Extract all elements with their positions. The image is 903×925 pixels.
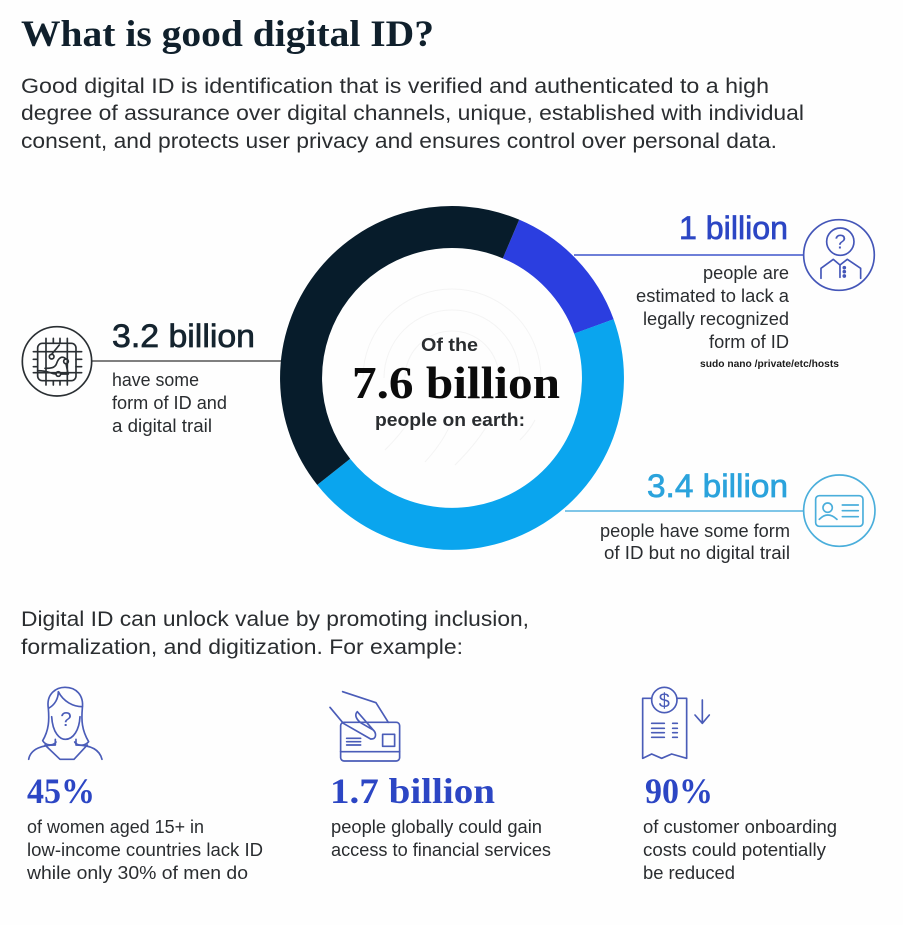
segment: 3.4 billion xyxy=(334,326,603,529)
icon: hand holding card xyxy=(330,692,400,761)
stat: 90%: of customer onboarding xyxy=(643,817,837,837)
stat: 90%: 90% xyxy=(645,771,713,811)
callout: 3.4 billion: people have some form xyxy=(600,521,790,541)
intro text block: consent, and protects user privacy and ensures control over personal data. xyxy=(21,129,777,153)
callout: 1 billion: 1 billion xyxy=(679,210,788,246)
icon: person with question mark: ? xyxy=(835,231,846,254)
callout: 3.2 billion: a digital trail xyxy=(112,416,212,436)
connector line: 3.4 billion xyxy=(565,510,803,512)
stat: 45% of women: 45% xyxy=(27,771,95,811)
intro text block: Good digital ID is identification that is verified and authenticated to a high xyxy=(21,74,769,98)
section intro text xyxy=(21,607,529,659)
donut chart: 7.6 billion people xyxy=(301,227,603,529)
callout: 1 billion: people are xyxy=(703,263,789,283)
overlay note: sudo nano /private/etc/hosts xyxy=(700,358,839,370)
callout: 3.2 billion xyxy=(22,318,281,436)
stat: 1.7 billion: people globally could gain xyxy=(331,817,542,837)
stat: 45% of women: of women aged 15+ in xyxy=(27,817,204,837)
title: What is good digital ID? xyxy=(21,14,434,55)
icon: woman with question mark: ? xyxy=(60,708,72,731)
callout: 3.2 billion: 3.2 billion xyxy=(112,318,255,354)
icon: circuit chip xyxy=(22,327,92,396)
icon: woman with question mark xyxy=(29,687,102,759)
stat: 1.7 billion: 1.7 billion xyxy=(330,771,495,811)
stat: 90%: be reduced xyxy=(643,863,735,883)
section intro text: Digital ID can unlock value by promoting inclusion, xyxy=(21,607,529,631)
icon: person with question mark xyxy=(804,220,874,290)
stat: 45% of women: low-income countries lack ID xyxy=(27,840,263,860)
section intro text: formalization, and digitization. For example: xyxy=(21,635,463,659)
donut centre label xyxy=(352,335,560,430)
stat: 45% of women: while only 30% of men do xyxy=(26,863,248,883)
stat: 90%: costs could potentially xyxy=(643,840,826,860)
callout: 3.4 billion: of ID but no digital trail xyxy=(604,543,790,563)
segment: 3.2 billion xyxy=(301,227,511,472)
callout: 3.2 billion: form of ID and xyxy=(112,393,227,413)
callout: 3.2 billion: have some xyxy=(112,370,199,390)
callout: 1 billion: estimated to lack a xyxy=(636,286,790,306)
stat: 1.7 billion: access to financial services xyxy=(331,840,551,860)
callout: 3.4 billion xyxy=(565,468,875,563)
donut centre label: people on earth: xyxy=(375,410,525,430)
stat: 45% of women xyxy=(26,687,263,883)
callout: 1 billion xyxy=(574,210,874,352)
connector line: 3.2 billion xyxy=(92,360,281,362)
icon: receipt with dollar and down arrow: $ xyxy=(659,690,670,712)
stat: 90% xyxy=(643,687,837,883)
connector line: 1 billion xyxy=(574,254,804,256)
donut centre label: 7.6 billion xyxy=(352,357,560,408)
stat: 1.7 billion xyxy=(330,692,551,860)
intro text block xyxy=(21,74,804,153)
segment: 1 billion xyxy=(511,239,594,326)
callout: 1 billion: form of ID xyxy=(709,332,789,352)
callout: 1 billion: legally recognized xyxy=(643,309,789,329)
icon: receipt with dollar and down arrow xyxy=(643,687,709,758)
donut centre label: Of the xyxy=(421,335,478,355)
icon: ID card xyxy=(804,475,875,546)
intro text block: degree of assurance over digital channels, unique, established with individual xyxy=(21,101,804,125)
callout: 3.4 billion: 3.4 billion xyxy=(647,468,788,504)
